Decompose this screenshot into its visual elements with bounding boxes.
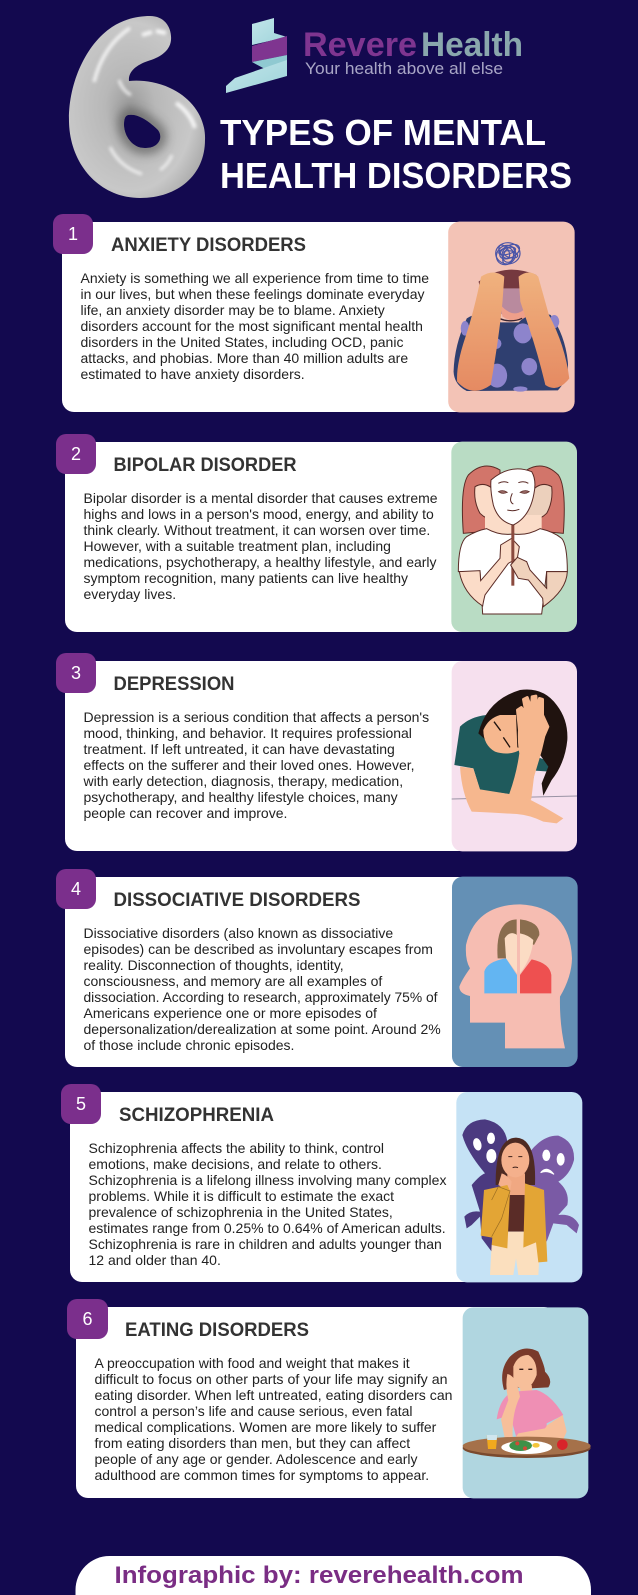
text: bipolar description: However, with a suitable treatment plan, including	[84, 538, 391, 554]
text: schizophrenia description: 12 and older than 40.	[88, 1252, 221, 1268]
panel: dissociative disorders	[56, 869, 578, 1067]
text: bipolar description: Bipolar disorder is a mental disorder that causes extreme	[84, 490, 438, 506]
footer	[76, 1556, 591, 1595]
text: eating description	[94, 1355, 452, 1483]
panel: bipolar disorder	[56, 434, 577, 632]
badge: number 3: 3	[71, 663, 81, 683]
text: anxiety description: disorders in the United States, including OCD, panic	[80, 334, 403, 350]
heading: dissociative disorders: DISSOCIATIVE DISORDERS	[114, 890, 360, 911]
icon: split person in head illustration	[452, 877, 578, 1067]
icon: logo ribbon	[226, 18, 287, 93]
title	[220, 112, 572, 196]
text: dissociative description: depersonalization/derealization at some point. Around 2%	[84, 1021, 441, 1037]
text: eating description: control a person’s life and cause serious, even fatal	[94, 1403, 413, 1419]
text: dissociative description: of those include chronic episodes.	[84, 1037, 294, 1053]
text: eating description: A preoccupation with food and weight that makes it	[94, 1355, 410, 1371]
text: bipolar description	[84, 490, 438, 602]
text: dissociative description: Americans experience one or more episodes of	[84, 1005, 377, 1021]
text: dissociative description: dissociation. According to research, approximately 75% of	[84, 989, 438, 1005]
logo wordmark: Revere	[303, 26, 417, 64]
icon: woman at table illustration	[463, 1307, 591, 1498]
logo: Revere Health: Health	[421, 26, 523, 64]
text: dissociative description	[84, 925, 441, 1053]
heading: anxiety disorders: ANXIETY DISORDERS	[111, 235, 306, 256]
footer credit text: Infographic by: reverehealth.com	[114, 1562, 524, 1589]
text: anxiety description: estimated to have anxiety disorders.	[80, 366, 305, 382]
text: anxiety description	[80, 270, 429, 382]
text: eating description: from eating disorders than men, but they can affect	[94, 1435, 410, 1451]
text: schizophrenia description: prevalence of schizophrenia in the United States,	[88, 1204, 393, 1220]
icon: woman with ghosts illustration	[456, 1092, 582, 1282]
icon: person holding mask illustration	[451, 442, 577, 632]
icon: depressed woman illustration	[452, 661, 577, 851]
text: eating description: people of any age or gender. Adolescence and early	[94, 1451, 418, 1467]
badge: number 6: 6	[82, 1309, 93, 1329]
text: depression description: mood, thinking, and behavior. It requires professional	[84, 725, 412, 741]
badge: number 1	[53, 214, 93, 254]
badge: number 4: 4	[71, 879, 81, 899]
text: depression description: psychotherapy, and healthy lifestyle choices, many	[84, 789, 398, 805]
text: dissociative description: episodes) can be described as involuntary escapes from	[84, 941, 433, 957]
title: TYPES OF MENTAL	[220, 112, 546, 153]
badge: number 5	[61, 1084, 101, 1124]
text: schizophrenia description: Schizophrenia is a lifelong illness involving many complex	[88, 1172, 446, 1188]
text: schizophrenia description	[88, 1140, 446, 1268]
panel: depression	[56, 653, 577, 851]
title: HEALTH DISORDERS	[220, 155, 572, 196]
text: anxiety description: disorders account for the most significant mental health	[80, 318, 423, 334]
text: anxiety description: in our lives, but when these feelings dominate everyday	[80, 286, 424, 302]
text: bipolar description: symptom recognition, many patients can live healthy	[84, 570, 408, 586]
text: bipolar description: highs and lows in a person's mood, energy, and ability to	[84, 506, 434, 522]
panel: eating disorders	[67, 1299, 591, 1498]
text: depression description: effects on the sufferer and their loved ones. However,	[84, 757, 415, 773]
text: anxiety description: attacks, and phobias. More than 40 million adults are	[80, 350, 408, 366]
badge: number 2: 2	[71, 444, 81, 464]
heading: schizophrenia: SCHIZOPHRENIA	[119, 1105, 274, 1126]
text: schizophrenia description: problems. While it is difficult to estimate the exact	[88, 1188, 394, 1204]
text: bipolar description: think clearly. Without treatment, it can worsen over time.	[84, 522, 430, 538]
text: depression description: treatment. If left untreated, it can have devastating	[84, 741, 395, 757]
text: anxiety description: Anxiety is something we all experience from time to time	[80, 270, 429, 286]
icon: anxious person illustration	[448, 222, 575, 412]
text: schizophrenia description: Schizophrenia is rare in children and adults younger than	[88, 1236, 442, 1252]
text: dissociative description: consciousness, and memory are all examples of	[84, 973, 382, 989]
text: eating description: adulthood are common times for symptoms to appear.	[94, 1467, 429, 1483]
badge: number 3	[56, 653, 96, 693]
text: depression description: people can recover and improve.	[84, 805, 287, 821]
text: schizophrenia description: Schizophrenia affects the ability to think, control	[88, 1140, 384, 1156]
heading: bipolar disorder: BIPOLAR DISORDER	[114, 455, 297, 476]
text: dissociative description: reality. Disconnection of thoughts, identity,	[84, 957, 344, 973]
heading: eating disorders: EATING DISORDERS	[125, 1320, 309, 1341]
text: bipolar description: everyday lives.	[84, 586, 176, 602]
badge: number 1: 1	[68, 224, 78, 244]
badge: number 4	[56, 869, 96, 909]
text: eating description: eating disorder. When left untreated, eating disorders can	[94, 1387, 452, 1403]
badge: number 6	[67, 1299, 108, 1339]
text: eating description: medical complications. Women are more likely to suffer	[94, 1419, 437, 1435]
icon: big glossy number 6	[69, 16, 205, 198]
panel: schizophrenia	[61, 1084, 582, 1282]
text: bipolar description: medications, psychotherapy, a healthy lifestyle, and early	[84, 554, 437, 570]
logo tagline: Your health above all else	[305, 60, 503, 78]
text: depression description	[82, 709, 429, 821]
text: depression description: with early detection, diagnosis, therapy, medication,	[82, 773, 403, 789]
logo: Revere Health	[226, 18, 523, 93]
text: depression description: Depression is a serious condition that affects a person's	[84, 709, 429, 725]
badge: number 2	[56, 434, 96, 474]
text: schizophrenia description: emotions, make decisions, and relate to others.	[88, 1156, 382, 1172]
heading: depression: DEPRESSION	[114, 674, 234, 695]
text: schizophrenia description: estimates range from 0.25% to 0.64% of American adults.	[88, 1220, 446, 1236]
panel: anxiety disorders	[53, 214, 575, 412]
text: eating description: difficult to focus on other parts of your life may signify an	[94, 1371, 448, 1387]
text: anxiety description: life, an anxiety disorder may be to blame. Anxiety	[80, 302, 385, 318]
text: dissociative description: Dissociative disorders (also known as dissociative	[84, 925, 393, 941]
badge: number 5: 5	[76, 1094, 86, 1114]
